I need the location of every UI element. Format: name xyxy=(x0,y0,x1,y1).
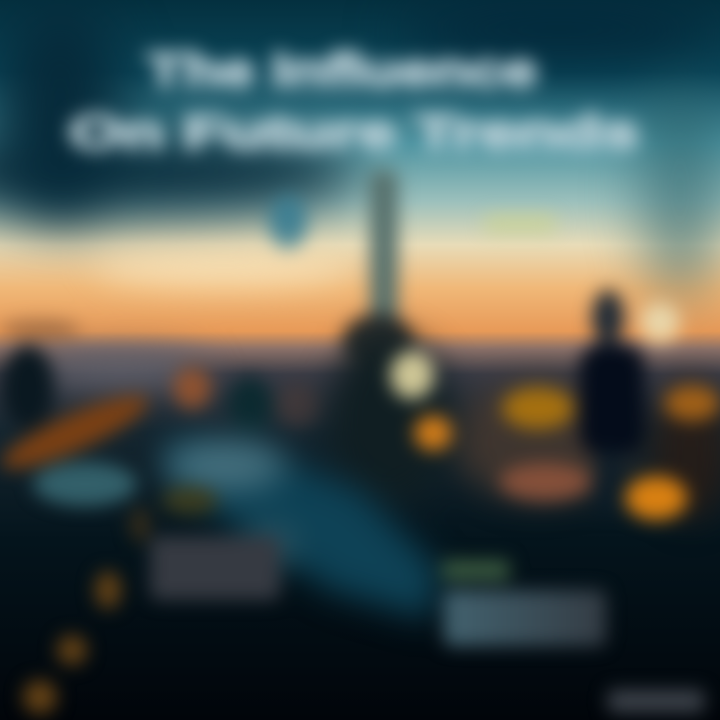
road lights xyxy=(23,507,150,714)
river / blue band xyxy=(33,440,440,620)
yellow label xyxy=(484,215,556,233)
tower xyxy=(342,170,414,370)
green label xyxy=(442,560,510,580)
corner label xyxy=(608,690,704,712)
title xyxy=(69,44,639,158)
lower text panel xyxy=(444,590,606,646)
sky: dark clouds and glow xyxy=(0,0,720,340)
title: The Influence xyxy=(147,44,537,96)
city lights xyxy=(390,302,720,520)
city horizon and haze xyxy=(0,335,720,520)
person silhouette xyxy=(580,290,644,512)
title: On Future Trends xyxy=(69,106,639,158)
